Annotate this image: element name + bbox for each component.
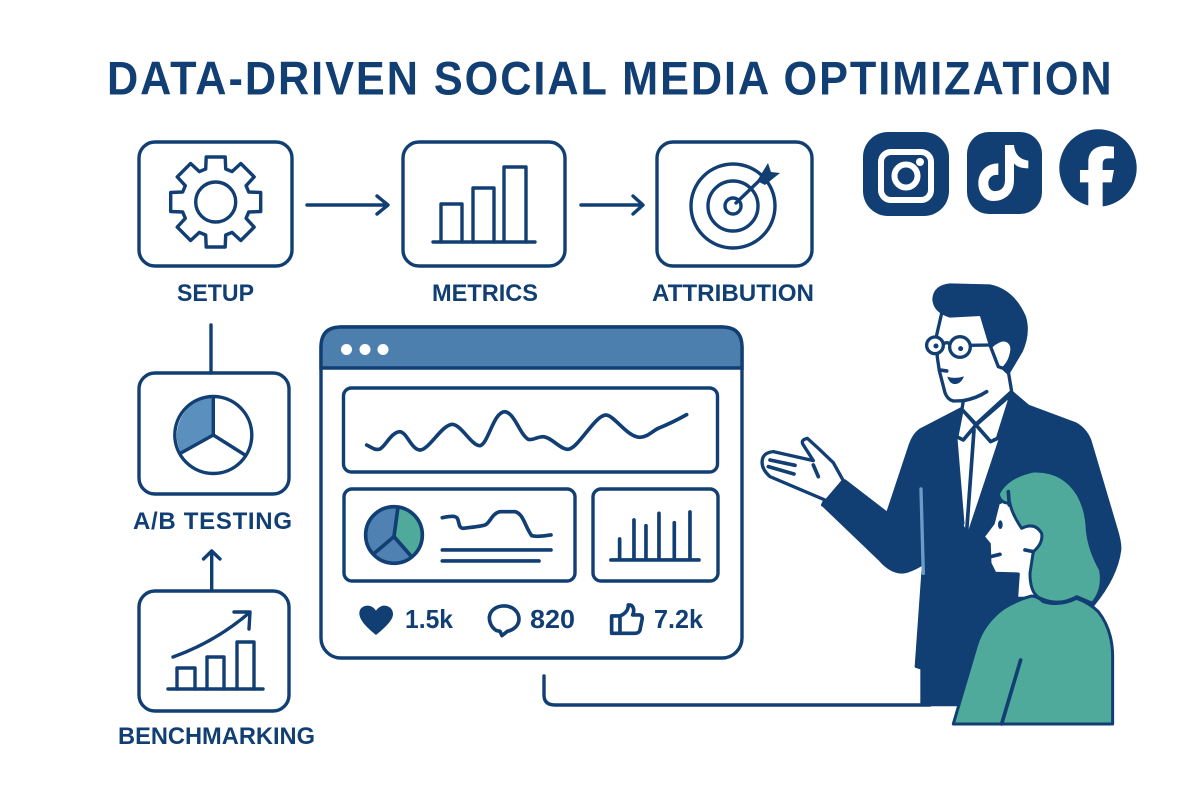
attribution box bbox=[657, 142, 812, 266]
setup label: SETUP bbox=[177, 280, 254, 307]
step: attribution bbox=[652, 142, 814, 307]
icon: tiktok bbox=[967, 132, 1042, 214]
social icons bbox=[863, 129, 1137, 216]
sweater line bbox=[1002, 660, 1021, 724]
A/B testing label: A/B TESTING bbox=[133, 508, 292, 535]
hair bbox=[998, 471, 1101, 603]
metrics label: METRICS bbox=[432, 280, 538, 307]
title: DATA-DRIVEN SOCIAL MEDIA OPTIMIZATION bbox=[107, 52, 1112, 105]
arrow: metrics to attribution bbox=[581, 196, 643, 214]
stat: comments bbox=[489, 604, 575, 636]
arrow: setup to metrics bbox=[307, 196, 388, 214]
panel: pie and trend bbox=[344, 489, 575, 581]
panel: dashboard window bbox=[321, 327, 742, 658]
finger lines bbox=[768, 460, 818, 477]
nose and smile bbox=[939, 370, 987, 401]
step: metrics bbox=[403, 142, 565, 307]
illustration: woman bbox=[953, 471, 1113, 724]
illustration: presenter man bbox=[762, 284, 1120, 705]
A/B testing box bbox=[139, 373, 289, 494]
attribution label: ATTRIBUTION bbox=[652, 280, 814, 307]
stat: likes bbox=[359, 604, 454, 635]
step: A/B testing bbox=[133, 373, 292, 535]
glasses bbox=[927, 337, 991, 357]
ear bbox=[991, 339, 1012, 368]
icon: instagram bbox=[863, 132, 949, 216]
jacket bbox=[823, 393, 1120, 705]
icon: bar chart bbox=[433, 167, 535, 242]
hair strand bbox=[1003, 492, 1015, 505]
step: setup bbox=[139, 142, 292, 307]
window title bar bbox=[321, 327, 742, 368]
stat: likes: 1.5k bbox=[405, 604, 454, 634]
icon: gear bbox=[171, 157, 261, 247]
window frame bbox=[321, 327, 742, 658]
neck and face bbox=[983, 497, 1043, 598]
metrics box bbox=[403, 142, 565, 266]
panel: line chart bbox=[344, 388, 718, 472]
icon: growth chart bbox=[168, 612, 263, 689]
benchmarking box bbox=[139, 591, 289, 711]
icon: pie chart bbox=[175, 396, 252, 474]
panel: bar chart bbox=[593, 489, 718, 581]
connector: setup to A/B testing bbox=[209, 325, 213, 373]
eyes bbox=[933, 343, 963, 351]
shirt bbox=[956, 395, 1012, 533]
arrow: benchmarking to A/B testing bbox=[204, 551, 220, 590]
stat: comments: 820 bbox=[530, 604, 575, 634]
pointer stick bbox=[921, 489, 923, 573]
stat: thumbs up: 7.2k bbox=[654, 604, 704, 634]
baseline connector bbox=[544, 676, 930, 705]
hair bbox=[933, 284, 1027, 374]
hand bbox=[762, 438, 843, 505]
icon: target with dart bbox=[691, 163, 780, 248]
icon: facebook bbox=[1059, 129, 1137, 207]
stat: thumbs up bbox=[612, 604, 704, 634]
sweater bbox=[953, 596, 1113, 724]
eye and mouth bbox=[991, 520, 1003, 557]
step: benchmarking bbox=[118, 591, 315, 750]
setup box bbox=[139, 142, 292, 266]
collar and tie lines bbox=[956, 394, 1012, 532]
neck and face bbox=[937, 313, 1012, 424]
ear inner line bbox=[1025, 550, 1033, 552]
benchmarking label: BENCHMARKING bbox=[118, 723, 315, 750]
